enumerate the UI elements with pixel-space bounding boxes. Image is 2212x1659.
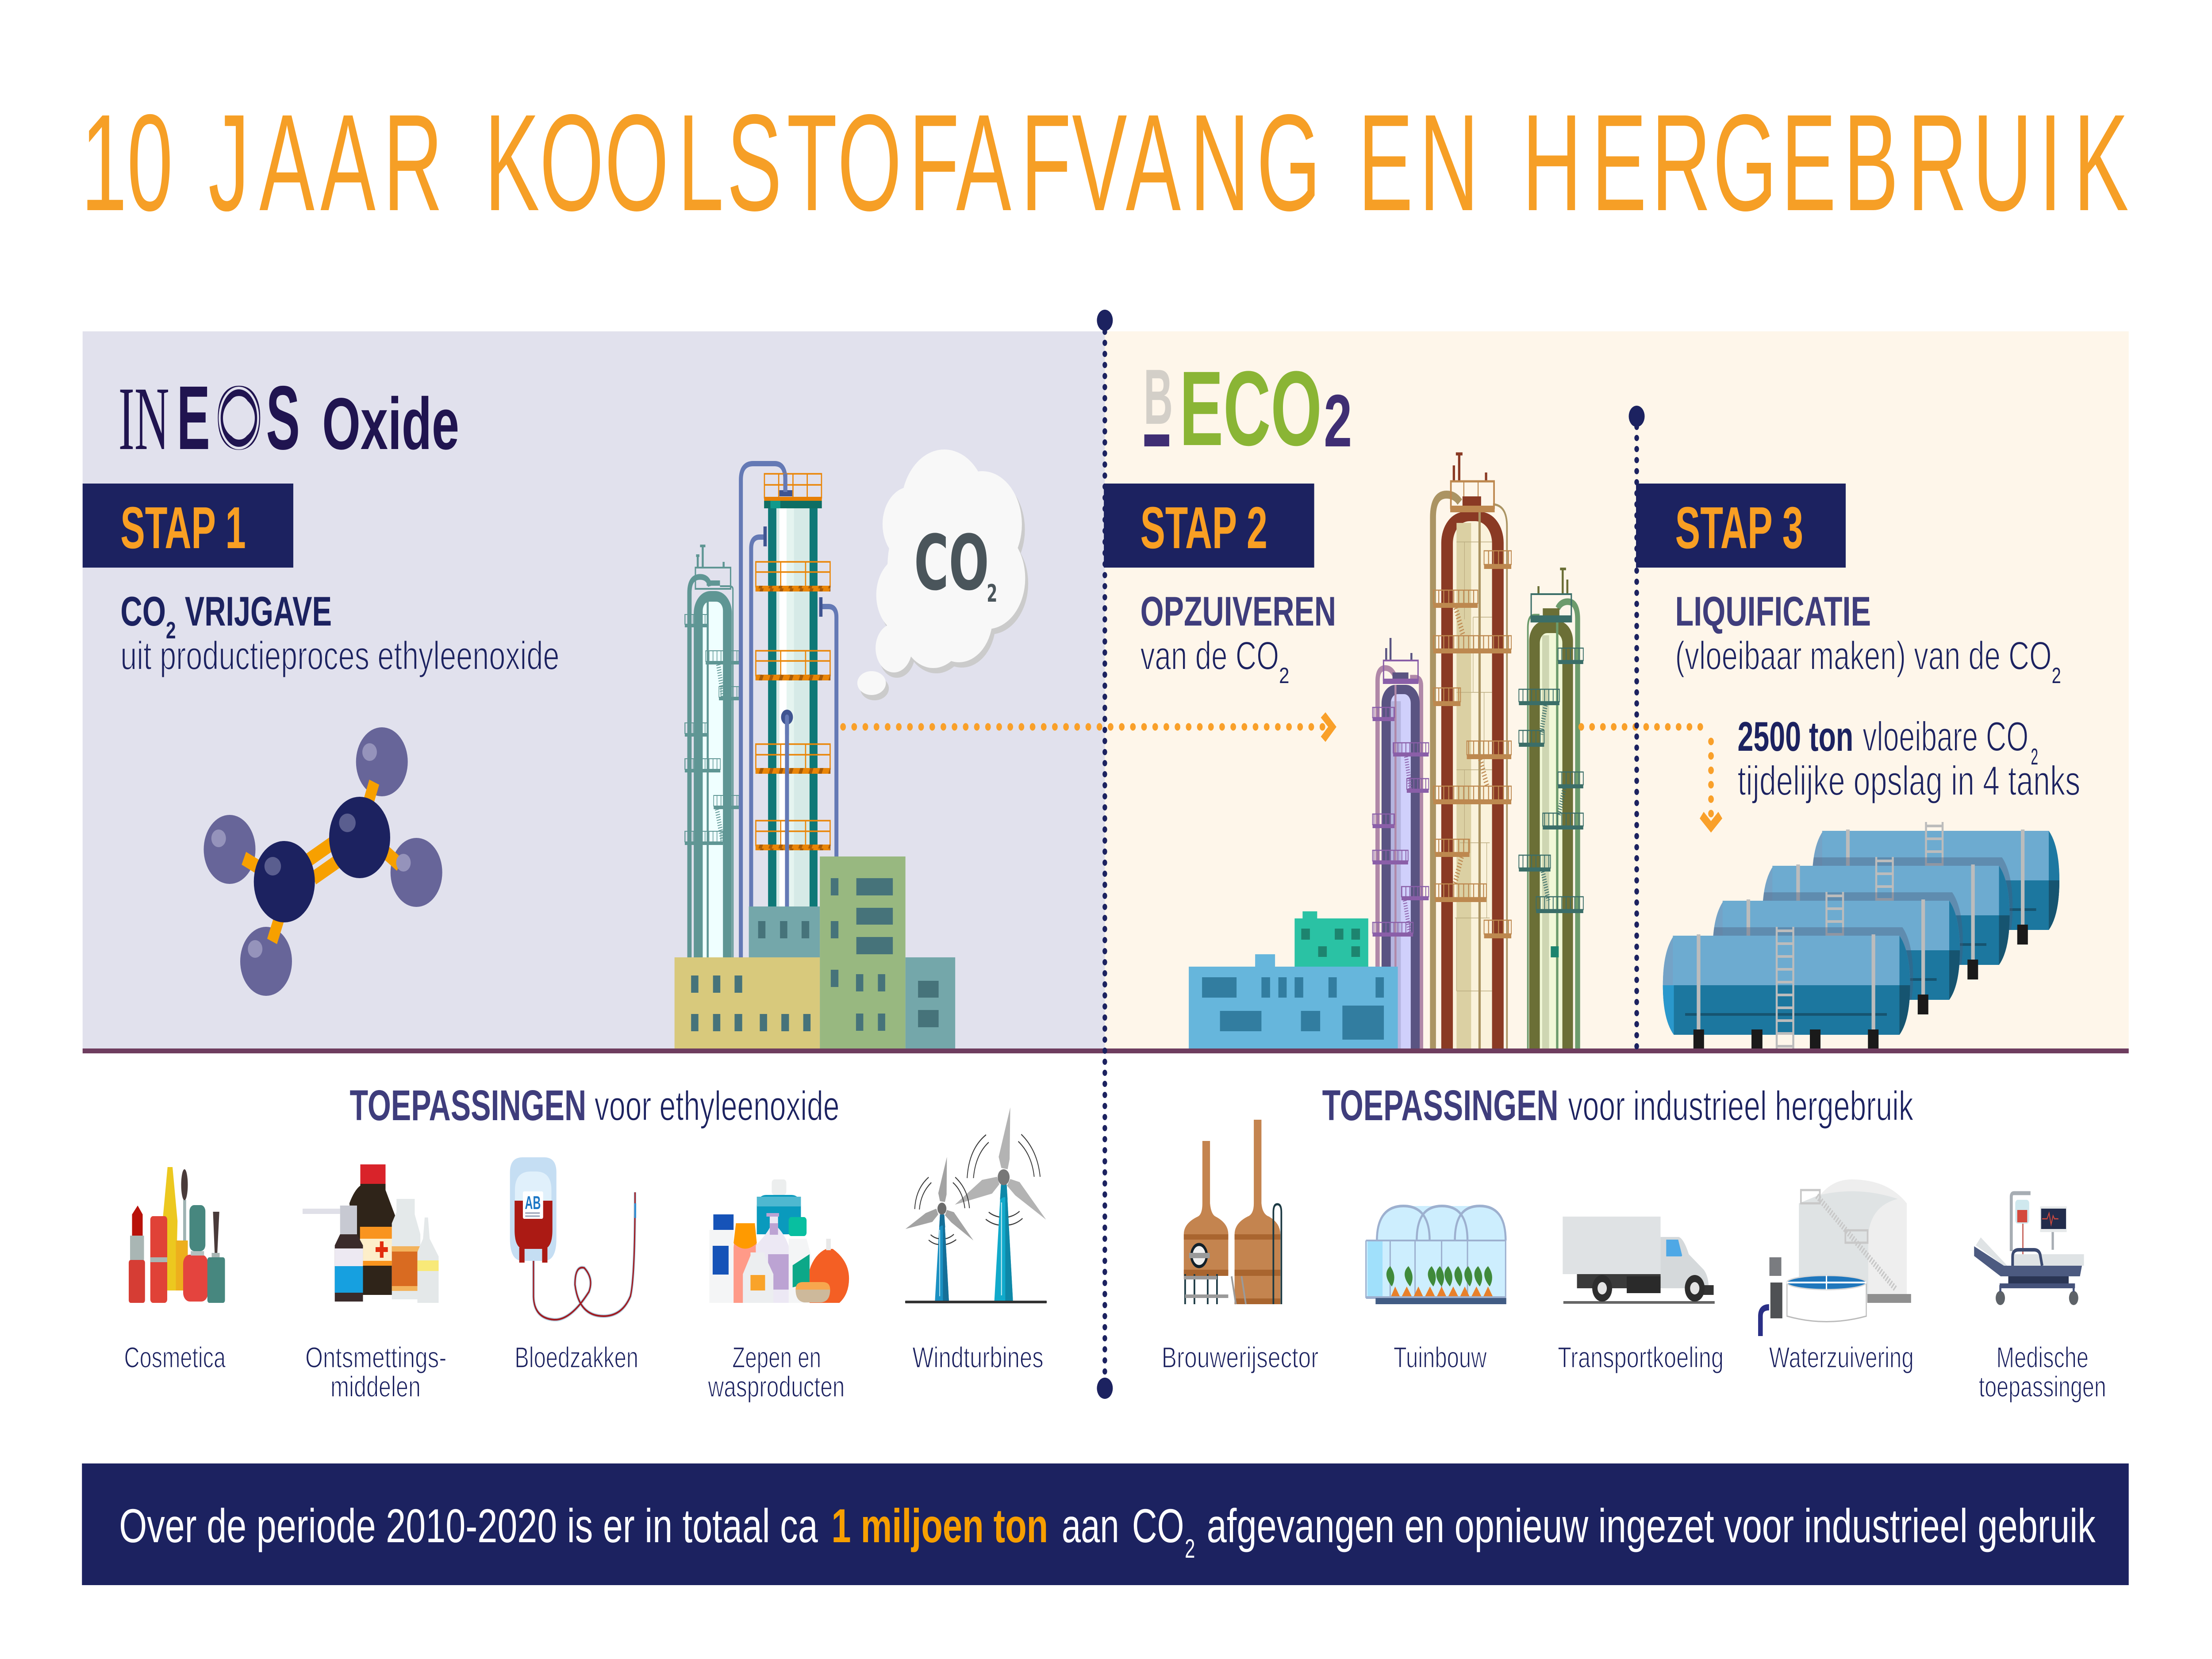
arrow: dotted flow from plant to purification [843,712,1336,742]
timeline: main divider dotted line [1097,310,1113,1399]
label: Bloedzakken: Bloedzakken [515,1341,638,1374]
callout: CO2 cloud: 2 [987,580,997,608]
label: Medische toepassingen: toepassingen [1979,1371,2106,1403]
title: 10 JAAR KOOLSTOFAFVANG EN HERGEBRUIK [81,86,2129,240]
label: Zepen en wasproducten: Zepen en [732,1341,821,1374]
label: Brouwerijsector: Brouwerijsector [1162,1341,1318,1374]
step 2 text: van de CO [1141,634,1279,678]
step 3 text: LIQUIFICATIE [1675,588,1871,634]
heading: applications industrial reuse [1322,1082,1913,1129]
purple column [1373,638,1429,1048]
logo: BECO2: 2 [1324,380,1352,462]
storage text [1738,713,2080,804]
panel: BECO2 background [1105,331,2129,1050]
label: Tuinbouw: Tuinbouw [1394,1341,1487,1374]
step 1 text: uit productieproces ethyleenoxide [120,634,559,678]
ground line [83,1048,2129,1053]
label: Medische toepassingen [1979,1341,2106,1403]
step 2 label: STAP 2 [1141,495,1267,561]
step 3 text: 2 [2052,664,2061,688]
icon: water treatment [1760,1179,1911,1336]
blue pipes back [741,464,837,957]
step 2 text [1141,588,1336,688]
label: Ontsmettingsmiddelen: middelen [330,1371,421,1403]
icon: refrigerated truck [1563,1217,1715,1304]
logo: INEOS Oxide: O [215,368,263,469]
storage text: 2 [2031,743,2038,769]
logo: BECO2: ECO [1179,349,1322,468]
step 2 label [1104,484,1314,568]
label: Zepen en wasproducten: wasproducten [708,1371,845,1403]
left teal column [685,546,739,957]
icon: wind turbines [905,1107,1047,1303]
icon: blood bag [510,1157,636,1320]
storage text: tijdelijke opslag in 4 tanks [1738,757,2080,804]
arrow: dotted flow to tanks [1581,727,1722,833]
label: Medische toepassingen: Medische [1997,1341,2089,1374]
logo: INEOS Oxide [119,368,459,469]
heading: applications ethylene oxide [349,1082,839,1129]
label: Ontsmettingsmiddelen: Ontsmettings- [305,1341,446,1374]
step 3 text [1675,588,2061,688]
step 1 label [83,484,293,568]
heading: applications industrial reuse: voor industrieel hergebruik [1568,1083,1913,1129]
brown column [1433,453,1511,1048]
logo: BECO2: B [1144,353,1173,441]
banner: summary [82,1463,2129,1585]
label: Ontsmettingsmiddelen [305,1341,446,1403]
banner: summary: afgevangen en opnieuw ingezet voor industrieel gebruik [1207,1500,2096,1553]
icon: cosmetics [129,1167,225,1303]
banner: summary: 2 [1185,1534,1195,1564]
icon: soaps and detergents [709,1179,849,1303]
label: Transportkoeling: Transportkoeling [1558,1341,1724,1374]
timeline: step 3 dotted line [1629,406,1645,1048]
label: Cosmetica: Cosmetica [124,1341,226,1374]
storage text: 2500 ton [1738,713,1853,760]
storage text: vloeibare CO [1863,713,2028,760]
step 1 text: VRIJGAVE [185,588,332,634]
panel: INEOS Oxide background [83,331,1105,1050]
icon: blood bag: AB [525,1192,541,1213]
step 1 label: STAP 1 [120,495,246,561]
banner: summary: CO [1132,1500,1184,1553]
callout: CO2 cloud [857,449,1028,700]
logo: INEOS Oxide: Oxide [322,383,459,465]
main column [756,473,830,906]
illustration: purification columns [1189,453,1583,1048]
step 2 text: OPZUIVEREN [1141,588,1336,634]
label: Waterzuivering: Waterzuivering [1769,1341,1914,1374]
banner: summary: Over de periode 2010-2020 is er in totaal ca [119,1500,818,1553]
callout: CO2 cloud: CO [914,518,989,607]
step 3 label: STAP 3 [1675,495,1803,561]
heading: applications industrial reuse: TOEPASSINGEN [1322,1082,1559,1129]
icon: medical bed [1974,1193,2084,1305]
step 3 label [1636,484,1846,568]
icon: greenhouse [1366,1206,1506,1304]
illustration: ethylene oxide plant [675,464,955,1048]
banner: summary: 1 miljoen ton [831,1500,1048,1553]
buildings [1189,911,1398,1048]
step 3 text: (vloeibaar maken) van de CO [1675,634,2052,678]
olive column [1519,568,1583,1048]
label: Zepen en wasproducten [708,1341,845,1403]
logo: INEOS Oxide: E [177,368,210,469]
icon: molecule [204,727,442,996]
label: Windturbines: Windturbines [912,1341,1044,1374]
heading: applications ethylene oxide: TOEPASSINGEN [349,1082,586,1129]
step 1 text: 2 [166,617,176,644]
plant buildings [675,856,955,1048]
step 1 text: CO [120,588,166,634]
icon: disinfectants [303,1164,438,1303]
step 1 text [120,588,559,678]
illustration: four storage tanks [1663,822,2059,1053]
banner: summary: aan [1062,1500,1119,1553]
step 2 text: 2 [1279,664,1289,688]
logo: INEOS Oxide: IN [119,369,169,469]
icon: brewery [1184,1120,1281,1304]
heading: applications ethylene oxide: voor ethyleenoxide [595,1083,839,1129]
logo: INEOS Oxide: S [266,368,300,469]
